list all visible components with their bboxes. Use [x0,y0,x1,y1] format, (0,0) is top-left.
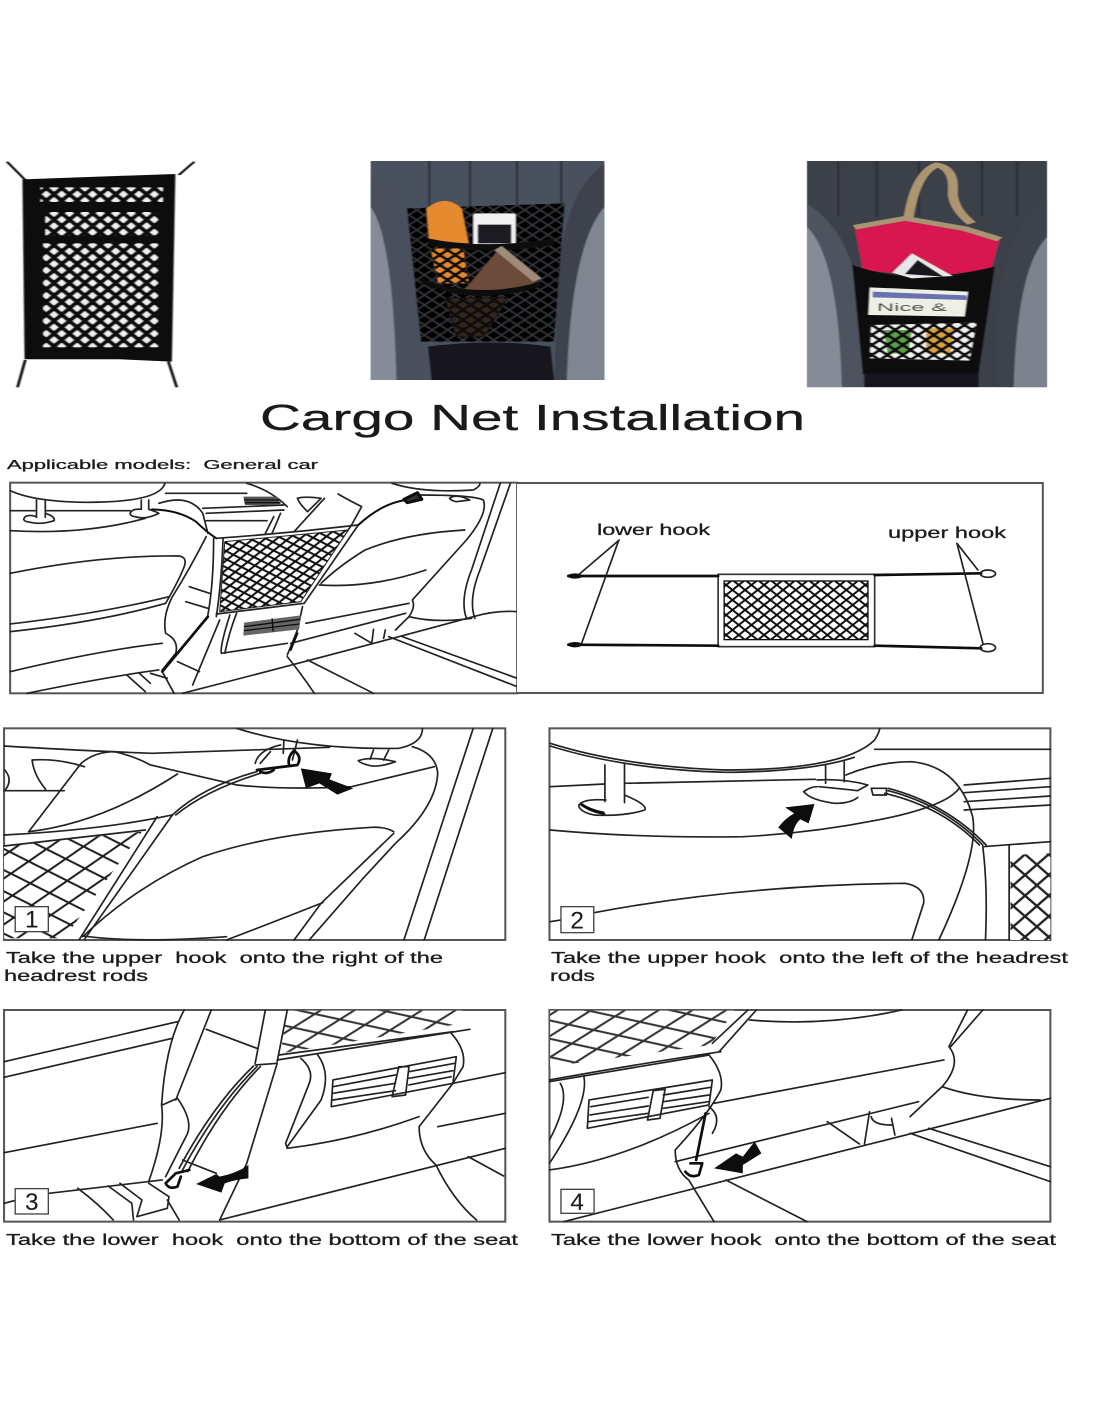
title: Cargo Net Installation [260,397,805,438]
step number 2: 2 [570,908,584,935]
vent icons [243,497,301,636]
arrow [301,768,353,795]
caption step 3: Take the lower hook onto the bottom of the seat [6,1232,519,1249]
step number 4: 4 [570,1189,584,1216]
subtitle: applicable models: Applicable models: General car [7,457,319,472]
photo: cargo net product [7,162,194,387]
step 4 diagram [549,1010,1050,1222]
step number 3 [15,1189,48,1216]
step 2 diagram [549,728,1050,940]
caption step 1: headrest rods [4,968,148,985]
caption step 2 [550,950,1069,985]
net diagram [718,574,875,647]
step number 1 [15,906,48,933]
step number 1: 1 [25,906,39,933]
step 1 diagram [4,728,505,940]
caption step 1 [4,950,443,985]
photo: net holding pink bag and box [807,161,1047,387]
hook [166,1170,189,1188]
net [4,832,142,938]
hook [257,751,299,773]
net [220,530,348,612]
step 3 diagram [4,1010,505,1222]
panel: overview of net fitted between seats [10,483,517,693]
step number 3: 3 [25,1189,39,1216]
caption step 2: rods [550,968,595,985]
arrow [778,804,814,839]
arrow [714,1142,761,1173]
photo: net holding baguette, phone and wallet [370,161,605,380]
caption step 1: Take the upper hook onto the right of the [6,950,443,967]
arrow [196,1165,248,1193]
label: upper hook: upper hook [888,525,1007,542]
caption step 4: Take the lower hook onto the bottom of the seat [551,1232,1057,1249]
strap and hook [685,1113,706,1176]
straps and hooks [152,493,422,672]
caption step 2: Take the upper hook onto the left of the headrest [551,950,1069,967]
net [1010,853,1050,940]
step number 4 [561,1189,594,1216]
net [550,1011,734,1067]
panel: hook diagram [517,483,1043,693]
box label: Nice & [877,301,948,313]
net [281,1011,463,1053]
label: lower hook: lower hook [597,522,711,539]
step number 2 [561,907,594,935]
